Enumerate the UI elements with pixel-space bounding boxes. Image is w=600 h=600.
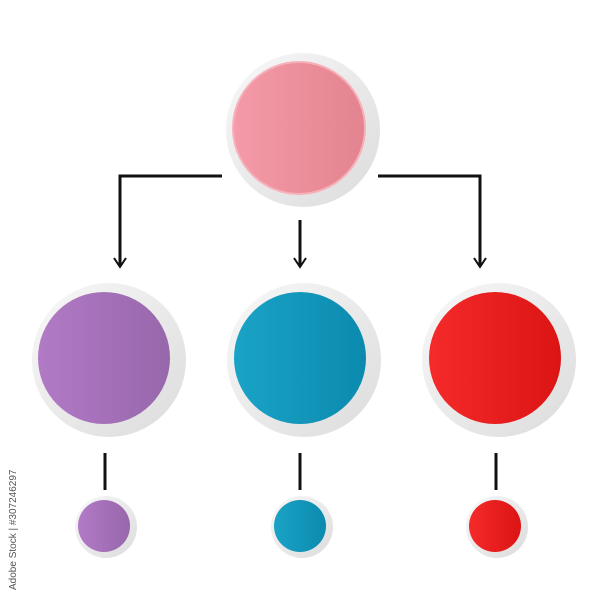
connector lines [105, 453, 496, 490]
watermark id text: Adobe Stock | #307246297 [8, 469, 19, 590]
top circle [226, 53, 380, 207]
circle: blue [227, 283, 381, 437]
arrow: middle [294, 220, 306, 267]
circle: purple [32, 283, 186, 437]
small circle: blue [271, 496, 333, 558]
small circle: red [466, 496, 528, 558]
circle: red [422, 283, 576, 437]
arrow: right [378, 176, 486, 267]
small circle: purple [75, 496, 137, 558]
arrow: left [114, 176, 222, 267]
